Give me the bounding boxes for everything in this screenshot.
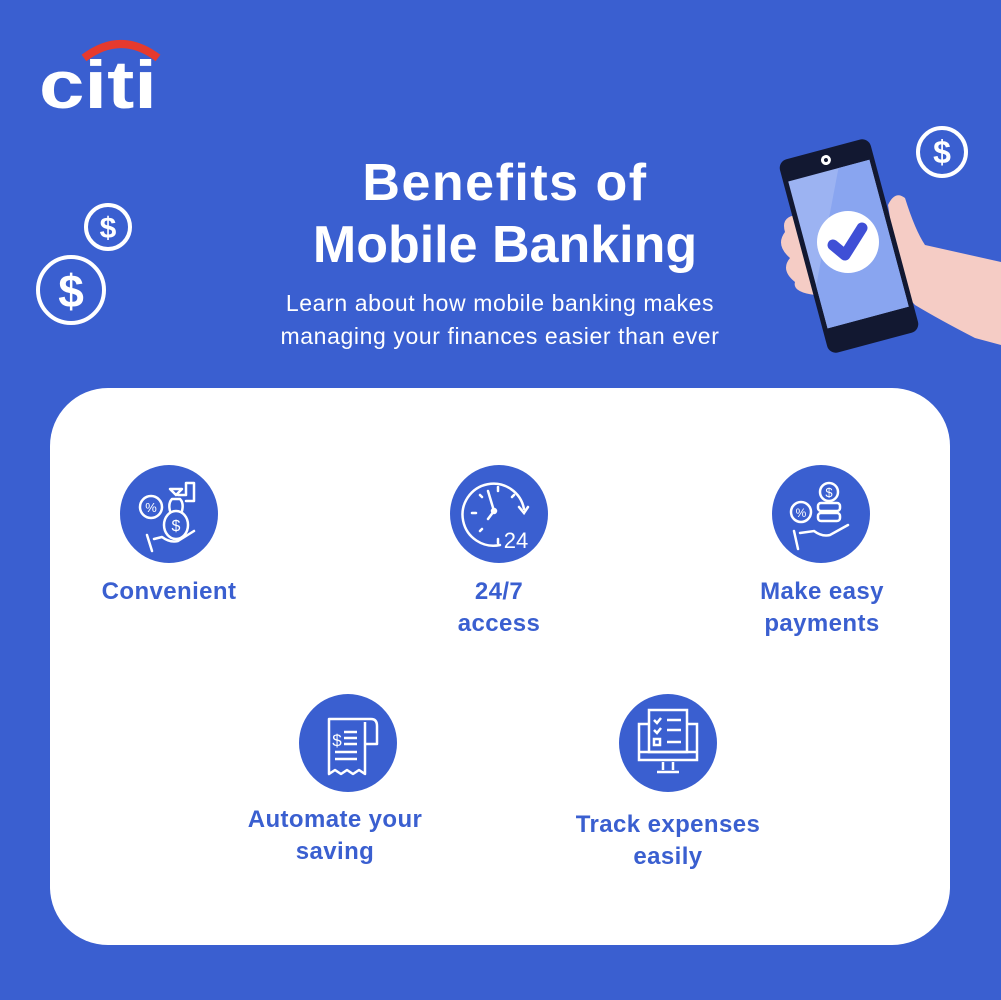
- label: make easy payments: [760, 578, 884, 637]
- title: [313, 154, 697, 274]
- label: make easy payments: payments: [764, 610, 880, 637]
- icon: payments: $: [825, 485, 833, 500]
- subtitle: Learn about how mobile banking makes: [286, 290, 714, 316]
- label: automate your saving: Automate your: [248, 806, 422, 833]
- label: 24/7 access: [458, 578, 540, 637]
- label: automate your saving: [248, 806, 422, 865]
- illustration: hand holding phone: [780, 126, 1001, 353]
- label: track expenses easily: Track expenses: [576, 811, 760, 838]
- label: automate your saving: saving: [296, 838, 374, 865]
- panel: benefits card: [50, 388, 950, 945]
- icon: 24/7 clock: [450, 465, 548, 563]
- illustration: hand holding phone: $: [933, 134, 951, 170]
- label: track expenses easily: easily: [633, 843, 703, 870]
- label: 24/7 access: access: [458, 610, 540, 637]
- label: convenient: Convenient: [102, 578, 236, 605]
- title: Benefits of: [362, 154, 648, 212]
- label: track expenses easily: [576, 811, 760, 870]
- icon: convenient: $: [172, 518, 181, 535]
- subtitle: [281, 290, 719, 349]
- icon: automate saving receipt: $: [332, 731, 342, 750]
- label: 24/7 access: 24/7: [475, 578, 523, 605]
- icon: 24/7 clock: 24: [504, 528, 528, 553]
- label: make easy payments: Make easy: [760, 578, 884, 605]
- icon: track expenses monitor: [619, 694, 717, 792]
- icon: convenient: [120, 465, 218, 563]
- icon: payments: %: [796, 506, 807, 520]
- subtitle: managing your finances easier than ever: [281, 323, 719, 349]
- title: Mobile Banking: [313, 216, 697, 274]
- icon: dollar coins left: [36, 203, 132, 325]
- icon: dollar coins left: $: [100, 212, 117, 245]
- icon: convenient: %: [145, 500, 157, 515]
- icon: payments: [772, 465, 870, 563]
- icon: automate saving receipt: [299, 694, 397, 792]
- icon: dollar coins left: $: [58, 265, 84, 317]
